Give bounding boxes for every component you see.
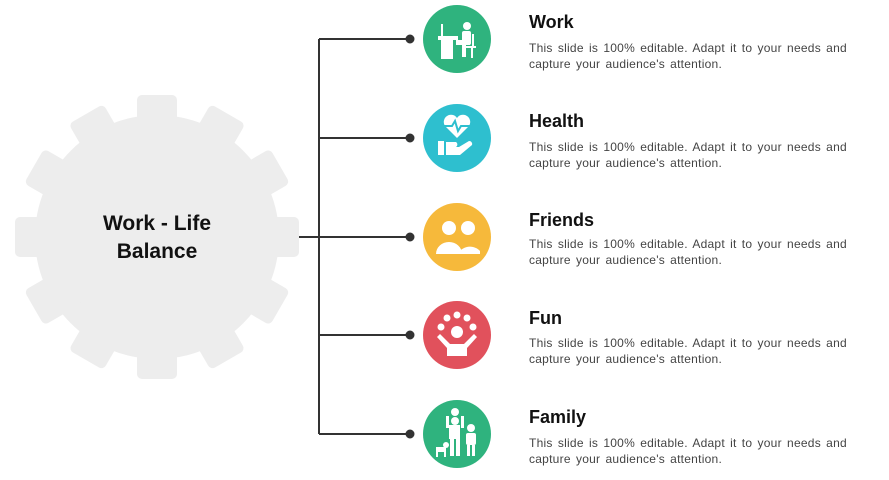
text: Work	[529, 12, 574, 32]
connectors	[299, 36, 414, 438]
text: fun	[529, 308, 847, 366]
icon: work	[423, 5, 491, 73]
gear title: Work - Life	[103, 212, 211, 235]
text: This slide is 100% editable. Adapt it to your needs and capture your audience's attention.	[529, 436, 847, 466]
text: This slide is 100% editable. Adapt it to your needs and capture your audience's attention.	[529, 41, 847, 71]
text: family	[529, 407, 847, 466]
icon: friends	[423, 203, 491, 271]
text: This slide is 100% editable. Adapt it to your needs and capture your audience's attention.	[529, 237, 847, 267]
text: This slide is 100% editable. Adapt it to your needs and capture your audience's attention.	[529, 140, 847, 170]
text: health	[529, 111, 847, 170]
text: Family	[529, 407, 586, 427]
text: Health	[529, 111, 584, 131]
text: Fun	[529, 308, 562, 328]
icon: fun	[423, 301, 491, 369]
text: friends	[529, 210, 847, 267]
text: work	[529, 12, 847, 71]
gear title	[103, 212, 211, 263]
icon: family	[423, 400, 491, 468]
gear	[15, 95, 299, 379]
text: This slide is 100% editable. Adapt it to your needs and capture your audience's attention.	[529, 336, 847, 366]
gear title: Balance	[117, 240, 197, 263]
text: Friends	[529, 210, 594, 230]
icon: health	[423, 104, 491, 172]
